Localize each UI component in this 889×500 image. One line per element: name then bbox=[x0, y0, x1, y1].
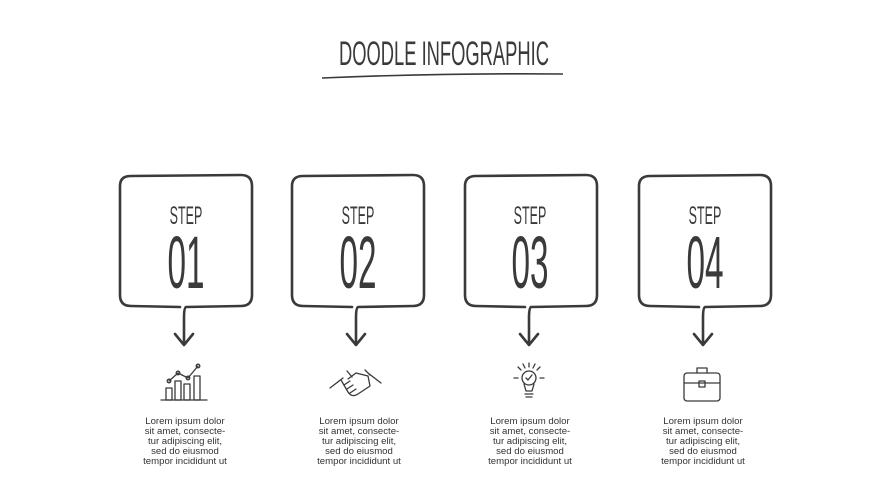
panel: step 01: STEP bbox=[170, 202, 202, 230]
icon: light bulb bbox=[514, 363, 544, 397]
text block 4: sed do eiusmod bbox=[669, 446, 737, 457]
text block 1: tempor incididunt ut bbox=[143, 456, 227, 467]
text block 2: Lorem ipsum dolor bbox=[319, 416, 400, 427]
text block 1: Lorem ipsum dolor bbox=[145, 416, 226, 427]
panel: step 01 bbox=[120, 175, 252, 345]
panel: step 04 bbox=[639, 175, 771, 345]
panel: step 03 bbox=[465, 175, 597, 345]
text block 3: tur adipiscing elit, bbox=[493, 436, 567, 447]
panel: step 01: 01 bbox=[167, 222, 205, 305]
text block 1 bbox=[143, 416, 227, 467]
panel: step 02: STEP bbox=[342, 202, 374, 230]
text block 2: sed do eiusmod bbox=[325, 446, 393, 457]
text block 3: sit amet, consecte- bbox=[490, 426, 570, 437]
text block 1: sit amet, consecte- bbox=[145, 426, 225, 437]
panel: step 02 bbox=[292, 175, 424, 345]
text block 2: tempor incididunt ut bbox=[317, 456, 401, 467]
panel: step 03: STEP bbox=[514, 202, 546, 230]
text block 4 bbox=[661, 416, 745, 467]
panel: step 04: STEP bbox=[689, 202, 721, 230]
text block 3 bbox=[488, 416, 572, 467]
text block 4: tur adipiscing elit, bbox=[666, 436, 740, 447]
text block 4: Lorem ipsum dolor bbox=[663, 416, 744, 427]
text block 1: sed do eiusmod bbox=[151, 446, 219, 457]
text block 4: tempor incididunt ut bbox=[661, 456, 745, 467]
text block 3: Lorem ipsum dolor bbox=[490, 416, 571, 427]
panel: step 03: 03 bbox=[511, 222, 549, 305]
text block 2: sit amet, consecte- bbox=[319, 426, 399, 437]
panel: step 04: 04 bbox=[686, 222, 724, 305]
text block 2: tur adipiscing elit, bbox=[322, 436, 396, 447]
icon: briefcase bbox=[684, 368, 720, 401]
text block 4: sit amet, consecte- bbox=[663, 426, 743, 437]
text block 1: tur adipiscing elit, bbox=[148, 436, 222, 447]
icon: bar chart bbox=[161, 364, 207, 400]
panel: step 02: 02 bbox=[339, 222, 377, 305]
text block 3: tempor incididunt ut bbox=[488, 456, 572, 467]
icon: handshake bbox=[330, 370, 381, 396]
text block 2 bbox=[317, 416, 401, 467]
title: DOODLE INFOGRAPHIC bbox=[339, 34, 549, 72]
text block 3: sed do eiusmod bbox=[496, 446, 564, 457]
